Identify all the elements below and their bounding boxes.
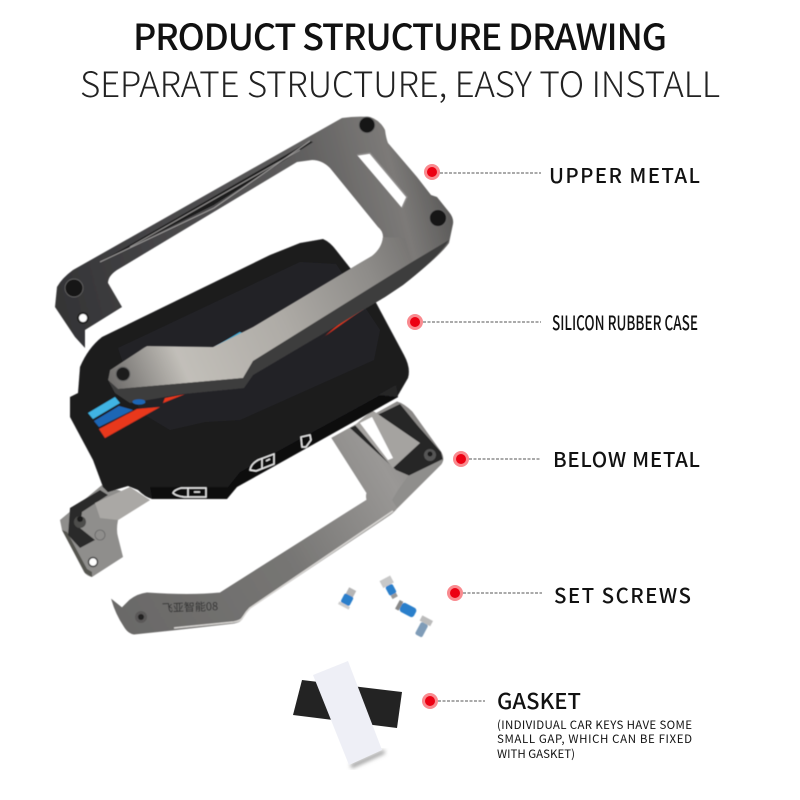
callout: gasket [422, 684, 581, 716]
upper metal frame [55, 117, 453, 405]
callout: silicon rubber case [407, 307, 698, 336]
groove [100, 141, 313, 262]
callout: set screws [447, 579, 691, 609]
engraved marking: 飞亚智能08 [162, 598, 218, 616]
bright lower bar [108, 237, 412, 389]
screw holes [359, 117, 375, 133]
silicon rubber case [70, 239, 409, 499]
slot highlight [357, 153, 407, 208]
blue dot [132, 399, 146, 405]
title: PRODUCT STRUCTURE DRAWING [133, 9, 667, 61]
callout: below metal: BELOW METAL [553, 443, 700, 473]
below metal frame [60, 402, 443, 634]
callout: below metal [453, 443, 700, 473]
colour stripes [88, 304, 363, 438]
set screws [338, 575, 433, 639]
gasket note [497, 717, 692, 762]
callout: upper metal [424, 159, 700, 189]
gasket note: WITH GASKET) [497, 746, 575, 762]
gasket note: SMALL GAP, WHICH CAN BE FIXED [497, 731, 692, 747]
gasket [293, 661, 402, 768]
right and lower arm [112, 402, 443, 634]
subtitle: SEPARATE STRUCTURE, EASY TO INSTALL [80, 57, 720, 108]
gasket note: (INDIVIDUAL CAR KEYS HAVE SOME [497, 717, 692, 733]
callout: set screws: SET SCREWS [554, 579, 691, 609]
button icons [173, 435, 311, 497]
callout: silicon rubber case: SILICON RUBBER CASE [552, 307, 698, 336]
callout: upper metal: UPPER METAL [549, 159, 700, 189]
left block [60, 485, 150, 577]
callout: gasket: GASKET [497, 684, 581, 716]
